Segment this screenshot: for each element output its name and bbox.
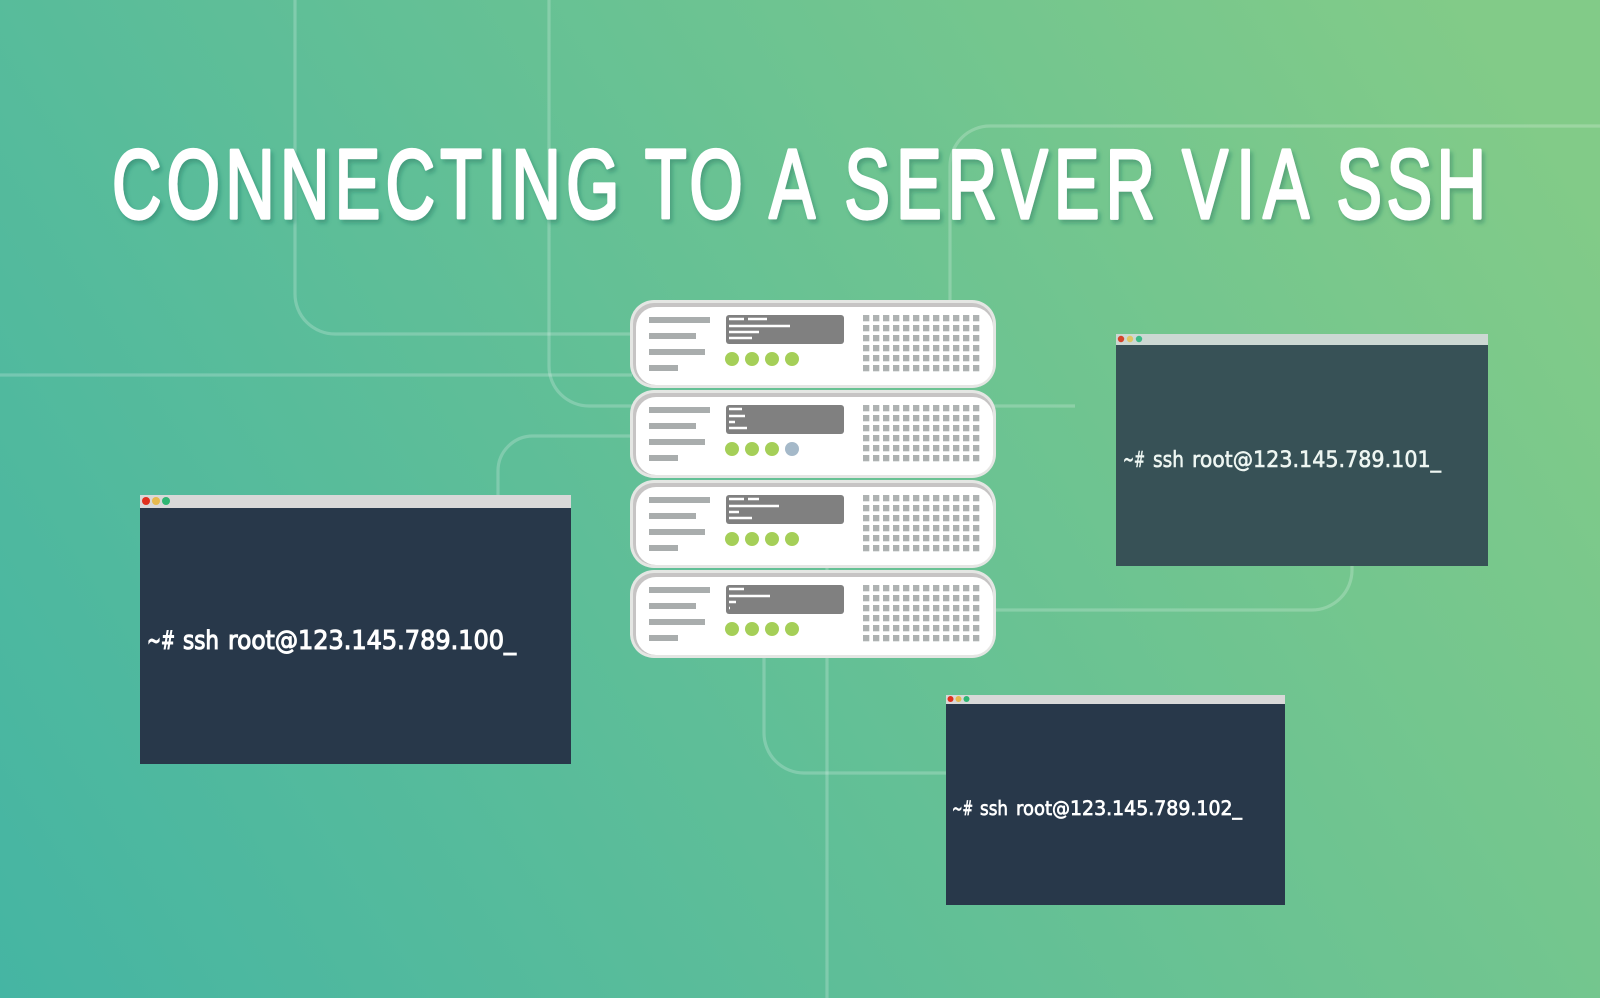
server unit 1	[630, 300, 996, 388]
terminal window: left: root@	[228, 626, 298, 656]
terminal window: left: ssh	[183, 626, 219, 656]
terminal window: right: root@	[1192, 448, 1253, 473]
terminal window: left: ~#	[147, 626, 175, 656]
terminal window: right: 123.145.789.101_	[1253, 448, 1442, 473]
terminal window: bottom	[946, 695, 1285, 905]
terminal window: right: ssh	[1153, 448, 1184, 473]
terminal window: bottom: ~#	[952, 797, 973, 820]
server unit 3	[630, 480, 996, 568]
terminal window: left: 123.145.789.100_	[298, 626, 516, 656]
server unit 2	[630, 390, 996, 478]
title: VIA	[1182, 129, 1309, 239]
terminal window: right	[1116, 334, 1488, 566]
title	[112, 129, 1486, 239]
title: TO	[645, 129, 743, 239]
server unit 4	[630, 570, 996, 658]
title: SSH	[1336, 129, 1486, 239]
terminal window: left	[140, 495, 571, 764]
title: SERVER	[844, 129, 1155, 239]
server rack	[630, 300, 996, 658]
title: CONNECTING	[112, 129, 619, 239]
title: A	[769, 129, 816, 239]
terminal window: right: ~#	[1123, 448, 1145, 473]
terminal window: bottom: 123.145.789.102_	[1070, 797, 1242, 820]
terminal window: bottom: root@	[1016, 797, 1070, 820]
terminal window: bottom: ssh	[980, 797, 1008, 820]
